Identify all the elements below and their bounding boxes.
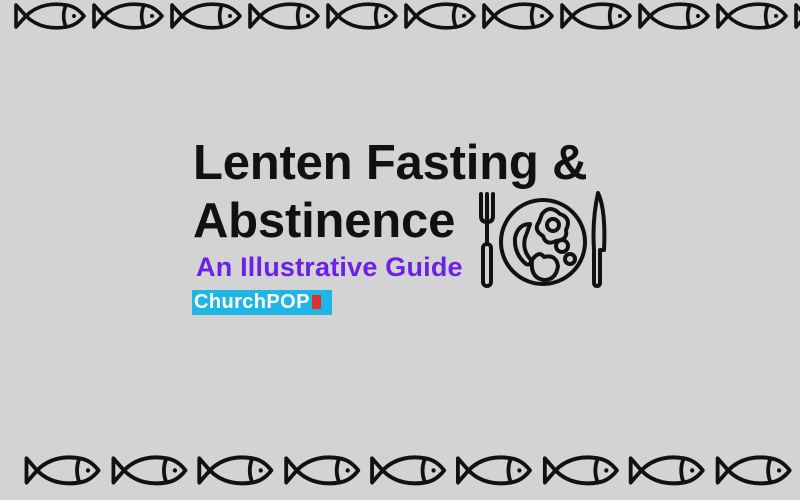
top fish border — [14, 2, 800, 30]
bottom fish border — [24, 455, 792, 486]
title line 2: Abstinence — [193, 194, 455, 248]
title: Lenten Fasting & — [193, 136, 587, 190]
logo: ChurchPOP: ChurchPOP — [194, 291, 310, 313]
subtitle: An Illustrative Guide — [196, 252, 463, 282]
icon: plate with fork and knife — [479, 191, 606, 288]
